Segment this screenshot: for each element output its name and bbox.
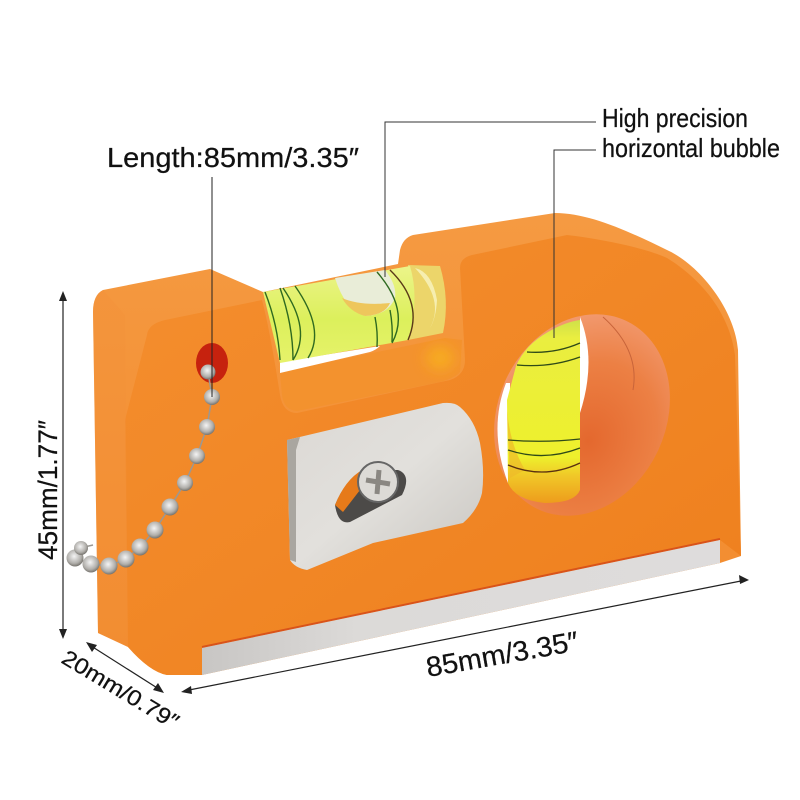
leader line: length: [211, 177, 213, 397]
horizontal vial window: [263, 265, 446, 373]
leader line: top bubble: [385, 122, 596, 277]
label: width: 85mm/3.35″: [424, 626, 581, 683]
label: horizontal bubble: horizontal bubble: [602, 133, 780, 163]
dimension arrow: width: [181, 575, 749, 694]
bottom metal strip: [202, 539, 720, 675]
level body: [93, 213, 741, 675]
dimension arrow: depth: [86, 642, 164, 693]
leader line: side bubble: [554, 150, 596, 338]
keychain hole: [196, 343, 228, 383]
label: depth: 20mm/0.79″: [57, 645, 184, 734]
bead chain: [66, 364, 220, 574]
circular hole with vertical vial: [462, 285, 702, 545]
label: high precision: High precision: [602, 103, 748, 133]
metal clip: [287, 403, 483, 570]
vial graduation lines: [265, 270, 413, 360]
label: length: Length:85mm/3.35″: [107, 142, 359, 173]
label: height: 45mm/1.77″: [33, 420, 63, 560]
dimension arrow: height: [59, 291, 67, 639]
